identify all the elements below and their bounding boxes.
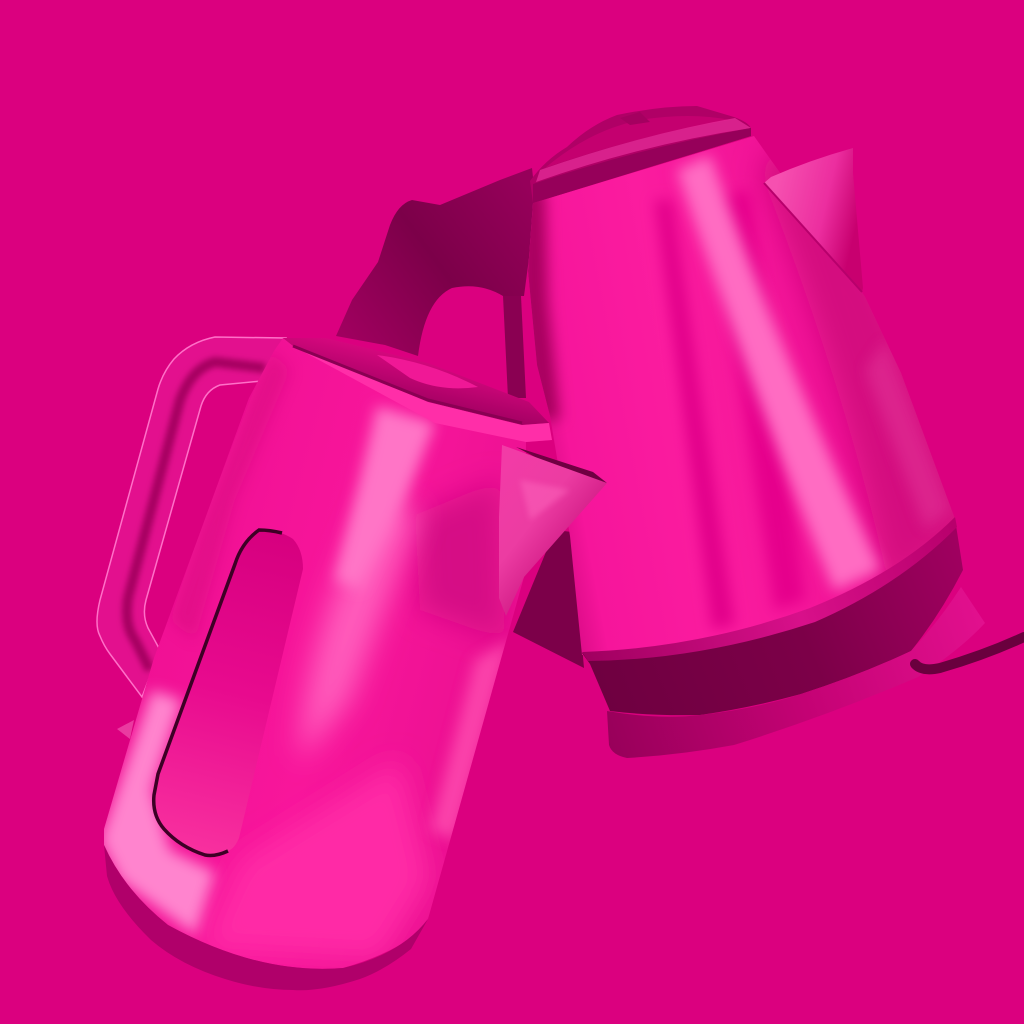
right kettle spout (764, 148, 863, 292)
right kettle base rim (582, 517, 957, 661)
right kettle body (528, 136, 954, 655)
left kettle handle (97, 337, 286, 697)
left kettle body (104, 338, 526, 969)
right kettle base band (582, 519, 963, 715)
left kettle dark upper-left shade (174, 358, 286, 632)
right kettle main highlight (677, 155, 881, 591)
left kettle lower glow (200, 760, 430, 960)
left kettle small tab (117, 720, 134, 739)
left kettle right edge glow (430, 640, 510, 840)
left kettle dark patch (415, 480, 505, 640)
right kettle foot (607, 587, 985, 758)
left kettle lid (283, 338, 552, 442)
right kettle dark right region (758, 155, 951, 570)
left kettle pale lower-left band (100, 690, 215, 935)
right kettle handle strip (503, 296, 526, 398)
right kettle: steel kettle behind (336, 106, 1024, 758)
right kettle shadow wedge (513, 530, 584, 668)
left kettle soft streak (300, 500, 420, 760)
right kettle dark left edge (520, 190, 560, 420)
illustration: two kettles on magenta background (96, 106, 1024, 990)
left kettle spout (499, 445, 607, 616)
right kettle dark streaks (655, 200, 735, 630)
left kettle water window (152, 528, 303, 858)
right kettle handle (336, 168, 536, 356)
right kettle lid (530, 106, 751, 203)
right kettle light right edge (866, 348, 948, 525)
left kettle: plastic kettle in front (90, 330, 607, 990)
left kettle upper highlight (335, 406, 435, 590)
right kettle cord (915, 637, 1024, 669)
left kettle bottom rim (104, 845, 428, 990)
